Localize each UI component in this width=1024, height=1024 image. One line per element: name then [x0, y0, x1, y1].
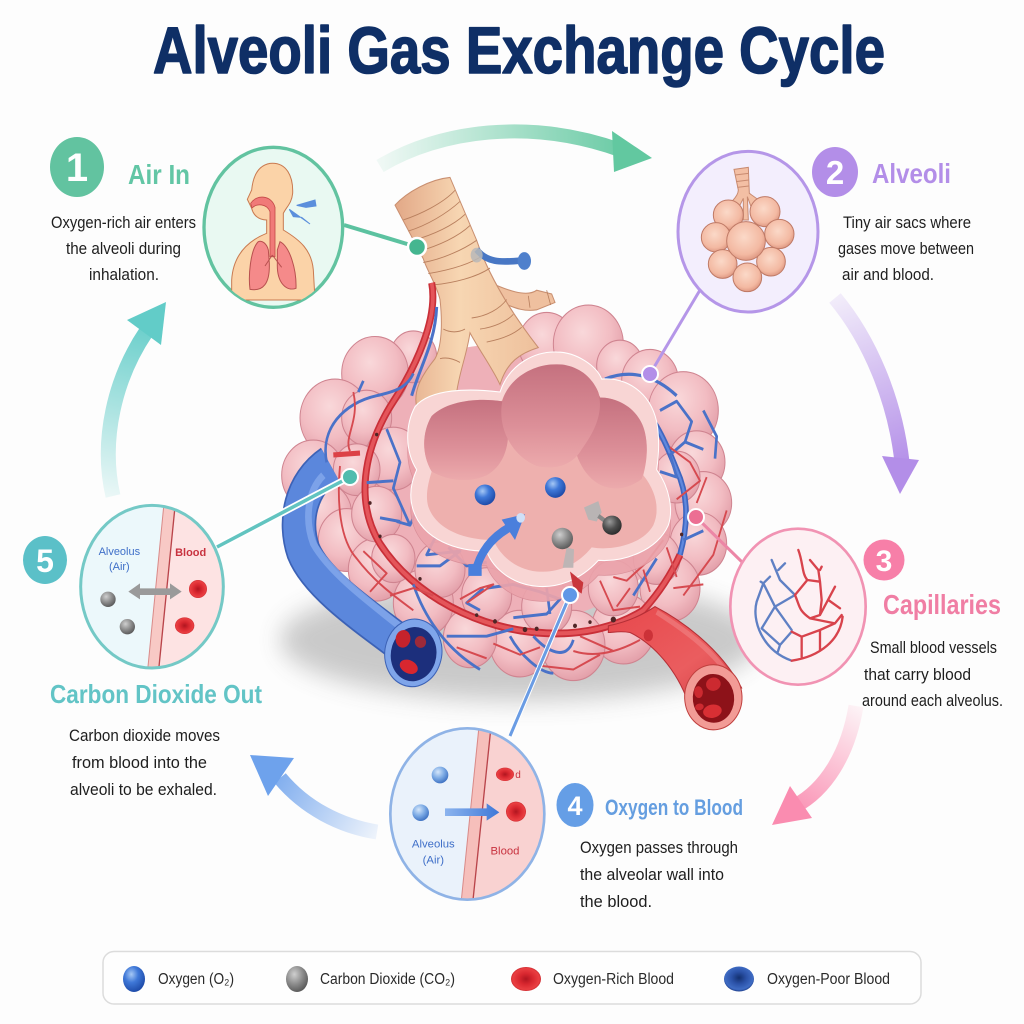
badge 5: 5 — [36, 543, 54, 579]
icon: alveoli cluster — [678, 151, 818, 312]
description 3: Small blood vessels — [870, 639, 997, 657]
legend: oxygen-rich blood — [511, 967, 674, 991]
icon: oxygen diffusion: Alveolus — [412, 839, 455, 851]
connector: alveoli — [642, 285, 703, 382]
legend: oxygen — [123, 966, 234, 992]
description 4: the blood. — [580, 893, 652, 911]
oxygen-poor vein — [299, 464, 410, 649]
capillary network: blue — [326, 374, 717, 673]
heading: capillaries: Capillaries — [883, 589, 1001, 620]
badge 2: 2 — [826, 154, 844, 191]
description 1: Oxygen-rich air enters — [51, 214, 196, 232]
blue curved arrow — [468, 513, 525, 576]
icon: oxygen diffusion — [389, 727, 546, 901]
carbon dioxide crossing wall — [552, 528, 583, 594]
title: Alveoli Gas Exchange Cycle — [153, 13, 885, 87]
alveolar lobes — [282, 305, 732, 681]
icon: oxygen diffusion: Blood — [491, 845, 519, 857]
blue side vessel on trachea — [471, 248, 531, 270]
ground shadow — [280, 579, 760, 701]
cut-away alveolus: cavity — [424, 364, 656, 572]
icon: capillary net — [730, 529, 866, 685]
connector: capillaries — [688, 509, 742, 562]
legend: oxygen-poor blood: Oxygen-Poor Blood — [767, 971, 890, 988]
step 5 — [23, 500, 262, 799]
description 3 — [862, 639, 1003, 710]
legend: oxygen-rich blood: Oxygen-Rich Blood — [553, 971, 674, 988]
cut-away alveolus: pale rim — [408, 352, 671, 587]
icon: carbon dioxide diffusion: Alveolus — [99, 546, 141, 558]
arrow: oxygen to carbon dioxide — [250, 755, 377, 832]
heading: alveoli: Alveoli — [872, 158, 951, 189]
cavity dome: centre — [501, 362, 600, 467]
badge 5 — [23, 536, 67, 584]
icon: oxygen diffusion: d — [515, 770, 521, 781]
dark flecks on vessel — [368, 433, 683, 632]
icon: head and lungs — [204, 147, 343, 307]
arrow: alveoli to capillaries — [835, 298, 919, 494]
description 2: Tiny air sacs where — [843, 214, 971, 232]
heading: oxygen to blood: Oxygen to Blood — [605, 795, 743, 820]
step 3 — [730, 529, 1003, 710]
badge 4 — [556, 783, 594, 827]
badge 1 — [50, 137, 104, 197]
badge 1: 1 — [66, 146, 88, 190]
legend — [103, 952, 921, 1004]
legend: carbon dioxide — [286, 966, 455, 992]
main blood vessel arc — [365, 283, 686, 633]
description 4 — [580, 839, 738, 911]
capillary network: red — [333, 392, 727, 670]
heading: carbon dioxide out: Carbon Dioxide Out — [50, 679, 262, 709]
connector: oxygen to blood — [510, 587, 578, 736]
description 1: the alveoli during — [66, 240, 181, 258]
oxygen molecule — [545, 477, 566, 498]
trachea and bronchi — [395, 177, 555, 407]
description 1 — [51, 214, 196, 284]
icon: carbon dioxide diffusion — [81, 500, 230, 677]
description 5: from blood into the — [72, 754, 207, 772]
cavity dome: right — [577, 396, 647, 488]
description 4: Oxygen passes through — [580, 839, 738, 857]
oxygen molecule — [475, 484, 495, 505]
description 5 — [69, 727, 220, 799]
description 1: inhalation. — [89, 266, 159, 284]
description 4: the alveolar wall into — [580, 866, 724, 884]
heading: air in: Air In — [128, 159, 190, 190]
icon: carbon dioxide diffusion: (Air) — [109, 561, 130, 573]
step 1 — [50, 137, 343, 307]
number 3: 3 — [876, 545, 892, 578]
arrow: capillaries to oxygen — [772, 706, 856, 825]
arrow: air in to alveoli — [380, 131, 652, 172]
description 2: gases move between — [838, 240, 974, 258]
connector: air in — [344, 225, 426, 256]
central alveoli illustration — [280, 177, 760, 734]
badge 4: 4 — [567, 791, 583, 821]
description 3: that carry blood — [864, 666, 971, 684]
legend: oxygen-poor blood — [724, 966, 890, 992]
legend: carbon dioxide: Carbon Dioxide (CO₂) — [320, 971, 455, 988]
legend: oxygen: Oxygen (O₂) — [158, 971, 234, 988]
step 4 — [390, 720, 743, 911]
connector: carbon dioxide — [217, 469, 358, 547]
cut-away alveolus: side wall — [408, 367, 671, 601]
artery — [608, 607, 742, 703]
step 2 — [678, 147, 974, 312]
description 5: alveoli to be exhaled. — [70, 781, 217, 799]
arrow: carbon dioxide to air in — [108, 302, 166, 496]
description 3: around each alveolus. — [862, 692, 1003, 710]
artery opening — [681, 661, 746, 734]
badge 3 — [864, 540, 904, 580]
vein opening — [376, 610, 450, 696]
carbon dioxide molecule — [584, 501, 622, 535]
description 2 — [838, 214, 974, 284]
cavity dome: left — [423, 398, 508, 480]
description 2: air and blood. — [842, 266, 934, 284]
icon: oxygen diffusion: (Air) — [423, 854, 444, 866]
description 5: Carbon dioxide moves — [69, 727, 220, 745]
icon: carbon dioxide diffusion: Blood — [175, 547, 206, 559]
badge 2 — [812, 147, 858, 197]
